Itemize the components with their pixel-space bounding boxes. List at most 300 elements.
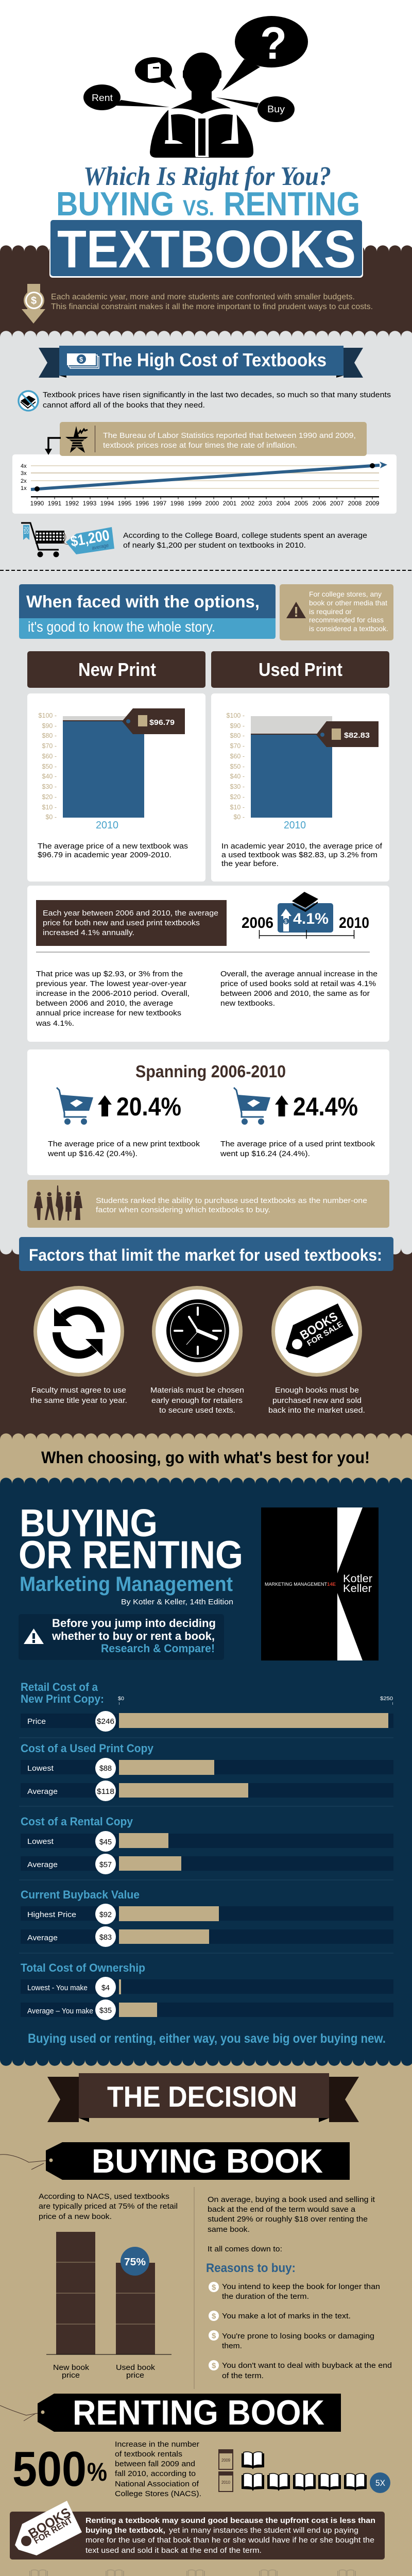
badge: 5x	[370, 2472, 390, 2493]
graphic: 4.1% between 2006 and 2010: 2010	[339, 914, 369, 931]
price tag: 96.79	[122, 708, 185, 734]
badge: 75%: 75%	[124, 2257, 146, 2268]
callout: increased 4.1% annually: Each year between 2006 and 2010, the average	[43, 909, 218, 918]
callout: students ranked used books: factor when considering which textbooks to buy.	[96, 1206, 270, 1214]
block: college board spending: According to the College Board, college students spent an average	[123, 531, 367, 540]
y axis labels: 2x	[21, 478, 27, 484]
column: convert rental	[162, 2570, 230, 2576]
callout: bureau of labor statistics: textbook prices rose at four times the rate of inflation.	[103, 441, 297, 450]
title block	[49, 162, 363, 279]
bar chart: cost of a rental copy: Cost of a Rental Copy	[21, 1815, 133, 1828]
bar chart: new print price: $30 -	[42, 783, 57, 790]
bar chart: new print price: $50 -	[42, 763, 57, 770]
icon: star with spike	[65, 426, 88, 453]
bar: average you make $35: $35	[99, 2006, 112, 2015]
x axis with years: 2006	[313, 500, 327, 507]
heading: buying vs renting	[56, 185, 360, 223]
bar: average $118	[21, 1781, 393, 1801]
bar chart: used print price: 2010	[284, 820, 306, 831]
block: prices have risen: cannot afford all of the books that they need.	[43, 401, 205, 410]
x axis with years: 1995	[118, 500, 132, 507]
stat: used print 24.4%: The average price of a used print textbook	[220, 1140, 375, 1148]
callout: bureau of labor statistics: The Bureau of Labor Statistics reported that between 1990 and 2009,	[103, 431, 356, 440]
text: new textbook detail	[36, 970, 190, 1028]
bar chart: used print price: $30 -	[230, 783, 245, 790]
bar chart: new print price: $100 -	[39, 712, 57, 719]
icon: money stack: $	[79, 355, 83, 363]
book cover: marketing management: Keller	[343, 1583, 372, 1595]
icon: shopping cart with 2010 ribbon: 10	[24, 530, 29, 535]
bar: lowest $88: Lowest	[27, 1764, 54, 1773]
factor: enough books: back into the market used.	[268, 1406, 365, 1415]
bar chart: new print price: $20 -	[42, 793, 57, 801]
x axis with years: 1992	[65, 500, 79, 507]
icon: books for rent tag	[15, 2501, 82, 2555]
bar: lowest $88: $88	[99, 1764, 112, 1773]
x axis with years: 2003	[259, 500, 272, 507]
bar chart: new vs used book price: New book	[53, 2363, 90, 2372]
text: used textbook detail: Overall, the average annual increase in the	[220, 970, 377, 978]
x axis with years: 2001	[223, 500, 237, 507]
text: increase in rentals: College Stores (NACS).	[115, 2489, 201, 2498]
icon: books for sale tag: BOOKS	[298, 1310, 340, 1343]
line chart: textbook prices vs inflation	[12, 454, 397, 514]
panel: spanning 2006-2010: Spanning 2006-2010	[135, 1062, 286, 1081]
bar chart: new print price: $40 -	[42, 773, 57, 780]
bar: lowest $88	[21, 1758, 393, 1778]
bar chart: used print price: $20 -	[230, 793, 245, 801]
tag heading: renting book: RENTING BOOK	[73, 2393, 324, 2432]
stat: new print 20.4%	[47, 1088, 200, 1158]
list: reasons to buy: You intend to keep the book for longer than	[222, 2282, 380, 2291]
book cover: marketing management: MARKETING MANAGEMENT	[265, 1582, 327, 1587]
stat: new print 20.4%: 20.4%	[116, 1092, 181, 1121]
graphic: 4.1% between 2006 and 2010: 4.1%	[293, 910, 329, 927]
factor: chosen early: to secure used texts.	[159, 1406, 235, 1415]
callout: renting may sound good: buying the textbook,	[85, 2526, 165, 2535]
ribbon heading: the decision	[47, 2073, 359, 2122]
scale labels: $250	[380, 1696, 393, 1702]
text: new textbook detail: previous year. The lowest year-over-year	[36, 979, 186, 988]
bar: price $246: $246	[97, 1717, 114, 1726]
x axis with years: 2000	[205, 500, 219, 507]
tag heading: buying book	[0, 2142, 350, 2180]
price tag: 96.79: $96.79	[149, 718, 175, 727]
y axis labels	[21, 463, 27, 492]
icon: coin with down arrow: $	[31, 295, 37, 307]
heading: factors that limit the market: Factors that limit the market for used textbooks:	[29, 1246, 382, 1264]
icon: blue cart	[57, 1088, 93, 1125]
column: materials returned	[316, 2570, 385, 2576]
bar chart: retail cost of new print copy	[21, 1681, 393, 1732]
callout: research and compare: whether to buy or rent a book,	[52, 1630, 215, 1642]
text: new textbook detail: was 4.1%.	[36, 1019, 74, 1028]
text: used priced at 75%: According to NACS, used textbooks	[39, 2192, 169, 2201]
bar: average $57: $57	[99, 1860, 112, 1869]
bar: average $57	[21, 1854, 393, 1874]
bar: average $83: $83	[99, 1933, 112, 1942]
stat: used print 24.4%: 24.4%	[293, 1092, 358, 1121]
bar chart: new print price: $0 -	[45, 814, 57, 821]
text: increase in rentals: fall 2010, according to	[115, 2469, 196, 2478]
block: prices have risen: Textbook prices have risen significantly in the last two decades, so much so that many students	[43, 391, 391, 399]
speech bubble: question mark	[222, 16, 308, 91]
bar: price $246: Price	[27, 1717, 46, 1726]
bar: highest price $92: Highest Price	[27, 1910, 76, 1919]
speech bubble: question mark: ?	[260, 18, 287, 69]
text: new textbook detail: between 2006 and 2010, the average	[36, 999, 173, 1008]
price tag: 82.83	[316, 721, 379, 747]
ribbon heading: the high cost of textbooks: The High Cost of Textbooks	[102, 349, 327, 370]
intro text	[51, 293, 373, 311]
y axis labels: 3x	[21, 470, 27, 477]
list: reasons to buy: of the term.	[222, 2371, 264, 2380]
x axis with years: 2002	[241, 500, 255, 507]
panel: used print	[211, 651, 389, 882]
bar chart: used print price: $0 -	[233, 814, 245, 821]
speech bubble: book	[135, 57, 176, 89]
hero illustration: student reading with speech bubbles	[83, 16, 308, 158]
book cover: marketing management: Kotler	[343, 1573, 372, 1585]
bar: average $83: Average	[27, 1934, 58, 1942]
callout: students ranked used books: Students ranked the ability to purchase used textbooks as the number-one	[96, 1196, 367, 1205]
text: used textbook detail: between 2006 and 2010, the same as for	[220, 989, 370, 998]
scale labels: $0	[118, 1696, 124, 1702]
bar chart: used print price: $60 -	[230, 753, 245, 760]
icon: warning triangle	[286, 602, 306, 618]
icon: no books	[19, 391, 38, 411]
bar chart: used print price: $100 -	[227, 712, 245, 719]
icon: books for rent tag: FOR RENT	[32, 2515, 75, 2546]
note: definition of a textbook: book or other media that	[309, 599, 387, 607]
icon: shopping cart with 2010 ribbon	[21, 523, 70, 557]
bar: lowest $45: Lowest	[27, 1837, 54, 1846]
icon: shopping cart with 2010 ribbon: 20	[24, 526, 29, 531]
intro block	[22, 284, 373, 324]
callout: research and compare: Before you jump into deciding	[52, 1617, 216, 1630]
bar: lowest you make $4	[21, 1977, 393, 1997]
callout: renting may sound good: yet in many instances the student will end up paying	[169, 2526, 358, 2535]
icon: coin bullets: $	[212, 2362, 216, 2370]
icon: money stack	[67, 353, 99, 368]
pictogram: rentals grew five times	[219, 2450, 390, 2493]
panel: annual increase	[27, 886, 389, 1042]
column: nacs estimates	[85, 2570, 152, 2576]
y axis labels: 1x	[21, 485, 27, 492]
speech bubble: buy	[216, 96, 295, 122]
icon: blue cart	[234, 1088, 270, 1125]
callout: renting may sound good: text used and sold it back at the end of the term.	[85, 2546, 262, 2555]
callout: research and compare	[19, 1614, 224, 1660]
text: buying and selling back: same book.	[208, 2225, 250, 2234]
x axis with years: 2004	[277, 500, 290, 507]
tag heading: buying book: BUYING BOOK	[92, 2142, 323, 2180]
list: reasons to buy: the duration of the term.	[222, 2292, 309, 2301]
bar: lowest $45	[21, 1831, 393, 1852]
bar chart: new print price: $80 -	[42, 732, 57, 739]
section heading: buying or renting marketing management: By Kotler & Keller, 14th Edition	[121, 1598, 233, 1606]
text: used priced at 75%: are typically priced at 75% of the retail	[39, 2202, 178, 2211]
panel: new print	[27, 651, 205, 882]
text: buying and selling back: student 29% or roughly $18 over renting the	[208, 2215, 368, 2224]
book cover: marketing management	[261, 1507, 379, 1660]
x axis with years: 1996	[135, 500, 149, 507]
list: reasons to buy: You make a lot of marks in the text.	[222, 2312, 351, 2320]
text: increase in rentals: National Association of	[115, 2480, 199, 2488]
block: college board spending: of nearly $1,200 per student on textbooks in 2010.	[123, 541, 306, 550]
icon: coin bullets: $	[212, 2312, 216, 2320]
bar chart: used print price: $40 -	[230, 773, 245, 780]
text: increase in rentals: of textbook rentals	[115, 2450, 182, 2459]
block: prices have risen	[19, 391, 391, 411]
panel: spanning 2006-2010	[27, 1049, 389, 1175]
bar chart: used print price: $70 -	[230, 742, 245, 750]
x axis with years: 2009	[366, 500, 380, 507]
heading: buying vs renting: RENTING	[224, 185, 360, 223]
stat: used print 24.4%: went up $16.24 (24.4%).	[220, 1149, 310, 1158]
note: definition of a textbook: recommended for class	[309, 616, 384, 624]
text: increase in rentals: Increase in the number	[115, 2440, 199, 2449]
block: college board spending	[21, 523, 367, 557]
icon: clock	[152, 1286, 243, 1377]
x axis with years	[30, 496, 380, 507]
bar chart: new vs used book price: price	[126, 2371, 144, 2380]
list: reasons to buy: You don't want to deal with buyback at the end	[222, 2361, 392, 2370]
price tag: 1,200 average: average	[92, 543, 109, 551]
factor: faculty agreement	[30, 1286, 127, 1405]
bar chart: new print price: $70 -	[42, 742, 57, 750]
factor: chosen early	[150, 1286, 244, 1415]
bar: average $83	[21, 1926, 393, 1947]
panel: when faced with the options: it's good to know the whole story.	[28, 619, 215, 635]
intro text: Each academic year, more and more students are confronted with smaller budgets.	[51, 293, 355, 301]
panel: when faced with the options: When faced with the options,	[26, 592, 260, 611]
intro text: This financial constraint makes it all the more important to find prudent ways to cut costs.	[51, 302, 373, 311]
callout: increased 4.1% annually	[36, 900, 227, 946]
text: used textbook detail: price of used books sold at retail was 4.1%	[220, 979, 376, 988]
bar: lowest you make $4: Lowest - You make	[27, 1984, 88, 1992]
price tag: 82.83: $82.83	[344, 731, 370, 740]
badge: 5x: 5X	[375, 2478, 385, 2488]
bar chart: new vs used book price: Used book	[116, 2363, 156, 2372]
note: definition of a textbook: is considered a textbook.	[309, 624, 388, 633]
icon: coin bullets: $	[212, 2283, 216, 2292]
text: buying and selling back	[208, 2195, 375, 2253]
bar: average $57: Average	[27, 1860, 58, 1869]
speech bubble: rent: Rent	[92, 93, 113, 103]
text: buying and selling back: On average, buying a book used and selling it	[208, 2195, 375, 2204]
bar: lowest you make $4: $4	[101, 1984, 110, 1992]
speech bubble: rent	[83, 84, 169, 110]
panel: used print: Used Print	[259, 659, 342, 680]
x axis with years: 2005	[295, 500, 308, 507]
bar chart: used print price	[227, 712, 379, 831]
bar chart: used print price: $50 -	[230, 763, 245, 770]
y axis labels: 4x	[21, 463, 27, 469]
bar chart: new print price: $10 -	[42, 804, 57, 811]
graphic: 4.1% between 2006 and 2010: 2006	[242, 914, 273, 931]
bar chart: used print price: $80 -	[230, 732, 245, 739]
text: used textbook detail: new textbooks.	[220, 999, 275, 1008]
panel: used print: In academic year 2010, the average price of	[221, 842, 383, 851]
callout: renting may sound good: Renting a textbook may sound good because the upfront cost is less than	[85, 2516, 375, 2525]
list: reasons to buy: You're prone to losing books or damaging	[222, 2332, 374, 2341]
stat: used print 24.4%	[220, 1088, 375, 1158]
bar chart: new print price	[39, 708, 185, 831]
speech bubble: buy: Buy	[267, 104, 285, 114]
factor: chosen early: early enough for retailers	[151, 1396, 243, 1405]
stat: new print 20.4%: The average price of a new print textbook	[48, 1140, 200, 1148]
note: definition of a textbook: For college stores, any	[309, 590, 382, 598]
bar chart: retail cost of new print copy: New Print Copy:	[21, 1692, 104, 1705]
panel: new print: New Print	[78, 659, 156, 680]
trend arrow	[31, 462, 387, 492]
heading: factors that limit the market	[19, 1237, 393, 1271]
icon: books row	[242, 2452, 367, 2491]
x axis with years: 1993	[83, 500, 97, 507]
graphic: 4.1% between 2006 and 2010: $	[284, 919, 287, 925]
badge: 75%	[121, 2247, 149, 2276]
list: reasons to buy: them.	[222, 2342, 242, 2350]
book cover: marketing management: 14E	[327, 1582, 336, 1587]
icon: warning triangle	[24, 1629, 44, 1644]
bar: price $246	[21, 1711, 393, 1732]
bar chart: new vs used book price: price	[62, 2371, 80, 2380]
callout: increased 4.1% annually: increased 4.1% annually.	[43, 928, 134, 937]
icon: books for sale tag	[271, 1286, 362, 1377]
bar: average $118: $118	[97, 1787, 114, 1796]
icon: books for rent tag: BOOKS	[26, 2504, 73, 2541]
stat: 500% rental increase: 500	[12, 2442, 87, 2497]
icon: 2009 calendar: 2009	[221, 2458, 231, 2463]
icon: coin bullets: $	[212, 2332, 216, 2340]
text: increase in rentals	[115, 2440, 201, 2498]
bar chart: total cost of ownership	[21, 1961, 393, 2020]
bar chart: cost of a used print copy	[21, 1742, 393, 1801]
section heading: buying or renting marketing management: OR RENTING	[19, 1533, 243, 1577]
bar chart: new print price: $90 -	[42, 722, 57, 730]
bar chart: used print price: $90 -	[230, 722, 245, 730]
x axis with years: 2007	[330, 500, 344, 507]
callout: renting may sound good: more for the use of that book than he or she would have if he or she bought the	[85, 2536, 374, 2545]
icon: coin bullets	[209, 2282, 219, 2370]
bar chart: cost of a rental copy	[21, 1815, 393, 1874]
callout: students ranked used books	[27, 1180, 389, 1228]
panel: new print: The average price of a new textbook was	[38, 842, 188, 851]
bar: highest price $92: $92	[99, 1910, 112, 1919]
text: increase in rentals: between fall 2009 and	[115, 2460, 195, 2468]
icon: 2010 calendar: 2010	[221, 2480, 231, 2485]
icon: 2009 calendar	[219, 2450, 233, 2469]
x axis with years: 1998	[170, 500, 184, 507]
callout: bureau of labor statistics	[60, 422, 367, 456]
bar chart: cost of a used print copy: Cost of a Used Print Copy	[21, 1742, 154, 1755]
tagline: when choosing: When choosing, go with what's best for you!	[41, 1448, 370, 1467]
text: buying and selling back: back at the end of the term would save a	[208, 2205, 356, 2214]
graphic: 4.1% between 2006 and 2010	[242, 892, 369, 939]
bar chart: new print price: 2010	[96, 820, 118, 831]
section heading: buying or renting marketing management	[19, 1501, 243, 1606]
text: new textbook detail: annual price increase for new textbooks	[36, 1009, 181, 1018]
factor: faculty agreement: the same title year to year.	[30, 1396, 127, 1405]
bar chart: new vs used book price	[46, 2232, 171, 2380]
x axis with years: 1999	[188, 500, 202, 507]
panel: used print: the year before.	[221, 859, 279, 868]
bar: lowest $45: $45	[99, 1838, 112, 1846]
x axis with years: 2008	[348, 500, 362, 507]
text: used priced at 75%: price of a new book.	[39, 2212, 112, 2221]
factor: enough books	[268, 1286, 365, 1415]
text: new textbook detail: That price was up $2.93, or 3% from the	[36, 970, 183, 978]
text: used textbook detail	[220, 970, 377, 1008]
heading: buying vs renting: BUYING	[56, 185, 174, 223]
icon: student silhouettes	[34, 1185, 82, 1221]
heading: buying vs renting: VS.	[183, 196, 214, 221]
bar chart: retail cost of new print copy: Retail Cost of a	[21, 1681, 98, 1693]
x axis with years: 1997	[153, 500, 167, 507]
note: definition of a textbook	[280, 584, 393, 640]
icon: coin with down arrow	[22, 284, 45, 324]
panel: new print: $96.79 in academic year 2009-2010.	[38, 851, 171, 859]
price tag: 1,200 average: $1,200	[70, 527, 111, 550]
callout: increased 4.1% annually: price for both new and used print textbooks	[43, 919, 200, 927]
ribbon heading: the decision: THE DECISION	[107, 2080, 297, 2113]
callout: renting may sound good	[10, 2501, 385, 2560]
bar: average $118: Average	[27, 1787, 58, 1796]
icon: books for sale tag: FOR SALE	[305, 1320, 345, 1348]
bar chart: total cost of ownership: Total Cost of Ownership	[21, 1961, 145, 1974]
stat: new print 20.4%: went up $16.42 (20.4%).	[47, 1149, 138, 1158]
bar chart: used print price: $10 -	[230, 804, 245, 811]
factor: enough books: Enough books must be	[275, 1386, 359, 1395]
panel: used print: a used textbook was $82.83, up 3.2% from	[221, 851, 377, 859]
icon: refresh arrows	[33, 1286, 124, 1377]
note: definition of a textbook: is required or	[309, 607, 352, 616]
scale labels	[118, 1696, 393, 1705]
list: reasons to buy: Reasons to buy:	[206, 2261, 296, 2275]
text: buying and selling back: It all comes down to:	[208, 2245, 282, 2253]
factor: chosen early: Materials must be chosen	[150, 1386, 244, 1395]
icon: student silhouette	[150, 53, 253, 158]
arrow: callout to chart	[45, 438, 61, 455]
panel: when faced with the options	[19, 584, 276, 639]
list: reasons to buy	[206, 2261, 392, 2380]
column: rental savings	[7, 2570, 72, 2576]
factor: enough books: purchased new and sold	[272, 1396, 362, 1405]
text: new textbook detail: increase in the 2006-2010 period. Overall,	[36, 989, 190, 998]
bar chart: current buyback value	[21, 1888, 393, 1947]
stat: 500% rental increase: %	[87, 2458, 107, 2486]
x axis with years: 1991	[48, 500, 62, 507]
text: used priced at 75%	[39, 2192, 178, 2221]
x axis with years: 1990	[30, 500, 44, 507]
bar: average you make $35: Average – You make	[27, 2007, 93, 2015]
bar chart: new print price: $60 -	[42, 753, 57, 760]
subtitle: which is right for you: Which Is Right for You?	[83, 162, 331, 191]
x axis with years: 1994	[100, 500, 114, 507]
bar chart: current buyback value: Current Buyback Value	[21, 1888, 140, 1901]
bar: highest price $92	[21, 1904, 393, 1924]
ribbon heading: the high cost of textbooks	[39, 346, 363, 378]
heading: textbooks banner: TEXTBOOKS	[57, 219, 356, 279]
section heading: buying or renting marketing management: Marketing Management	[20, 1573, 233, 1596]
icon: 2010 calendar	[219, 2472, 233, 2492]
factor: faculty agreement: Faculty must agree to use	[31, 1386, 126, 1395]
bar: average you make $35	[21, 1999, 393, 2020]
section heading: buying or renting marketing management: BUYING	[20, 1501, 158, 1545]
column: fees	[239, 2570, 305, 2576]
callout: research and compare: Research & Compare!	[101, 1642, 215, 1655]
